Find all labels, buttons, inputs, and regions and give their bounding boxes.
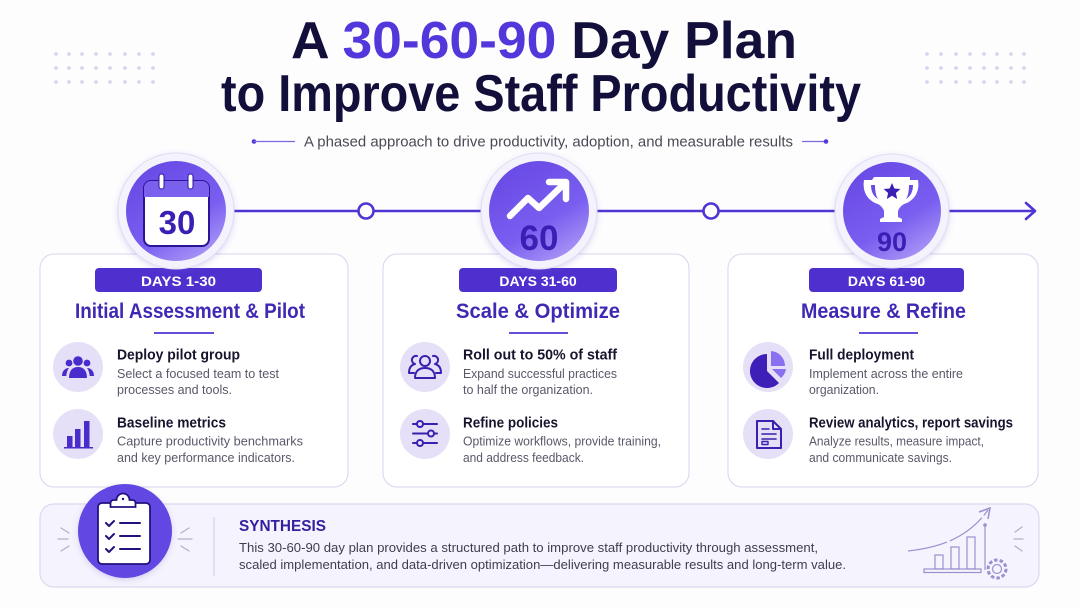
text: synthesis: [239, 518, 846, 572]
decorative dots left: [54, 52, 155, 84]
panel: synthesis: [40, 504, 1039, 587]
icon: rays around clipboard: [58, 528, 192, 551]
milestone icon: 90 trophy: 90: [877, 227, 907, 257]
badge: days 61-90: [809, 268, 964, 292]
icon: team outline: [400, 342, 450, 392]
item: roll out: to half the organization.: [463, 383, 593, 397]
text: synthesis: scaled implementation, and data-driven optimization—delivering measurable results and long-term value.: [239, 557, 846, 572]
badge: days 1-30: [95, 268, 262, 292]
item: refine policies: Optimize workflows, provide training,: [463, 434, 661, 448]
item: refine policies: Refine policies: [463, 416, 558, 432]
icon: bar chart: [53, 409, 103, 459]
heading: scale and optimize: Scale & Optimize: [456, 300, 620, 323]
panel: days 31-60: [383, 254, 689, 487]
badge: days 61-90: DAYS 61-90: [848, 273, 925, 289]
text: synthesis: This 30-60-90 day plan provides a structured path to improve staff productivity through assessment,: [239, 540, 818, 555]
icon: growth chart with gear: [908, 508, 1006, 578]
badge: days 1-30: DAYS 1-30: [141, 273, 216, 289]
milestone icon: 90 trophy: [835, 154, 949, 268]
title: A 30-60-90 Day Plan: [291, 12, 797, 70]
item: baseline metrics: [117, 416, 303, 465]
item: roll out: [463, 348, 617, 397]
heading: initial assessment: Initial Assessment & Pilot: [75, 300, 305, 323]
icon: pie chart: [743, 342, 793, 392]
item: full deployment: Full deployment: [809, 348, 914, 364]
item: baseline metrics: Baseline metrics: [117, 416, 226, 432]
text: synthesis: SYNTHESIS: [239, 518, 326, 535]
title: to Improve Staff Productivity: [221, 65, 861, 123]
item: refine policies: [463, 416, 661, 465]
icon: people group: [53, 342, 103, 392]
icon: clipboard checklist: [78, 484, 172, 578]
item: deploy pilot group: Deploy pilot group: [117, 348, 240, 364]
item: roll out: Roll out to 50% of staff: [463, 348, 617, 364]
heading: measure and refine: Measure & Refine: [801, 300, 966, 323]
item: baseline metrics: Capture productivity benchmarks: [117, 434, 303, 448]
icon: sliders: [400, 409, 450, 459]
item: review analytics: and communicate savings.: [809, 451, 952, 465]
item: review analytics: Review analytics, report savings: [809, 416, 1013, 432]
item: roll out: Expand successful practices: [463, 367, 617, 381]
item: refine policies: and address feedback.: [463, 451, 584, 465]
badge: days 31-60: [459, 268, 617, 292]
title: [221, 12, 861, 123]
panel: days 1-30: [40, 254, 348, 487]
icon: rays right: [1014, 527, 1023, 551]
item: full deployment: Implement across the entire: [809, 367, 963, 381]
item: review analytics: [809, 416, 1013, 465]
item: full deployment: [809, 348, 963, 397]
badge: days 31-60: DAYS 31-60: [499, 273, 577, 289]
item: full deployment: organization.: [809, 383, 879, 397]
icon: document: [743, 409, 793, 459]
milestone icon: 30 calendar: 30: [159, 204, 195, 241]
item: deploy pilot group: processes and tools.: [117, 383, 232, 397]
item: baseline metrics: and key performance indicators.: [117, 451, 295, 465]
panel: days 61-90: [728, 254, 1038, 487]
milestone icon: 60 growth arrow: [481, 153, 597, 269]
milestone icon: 30 calendar: [118, 153, 234, 269]
item: review analytics: Analyze results, measure impact,: [809, 434, 984, 448]
subtitle: A phased approach to drive productivity, adoption, and measurable results: [304, 134, 793, 150]
milestone icon: 60 growth arrow: 60: [520, 219, 558, 258]
item: deploy pilot group: [117, 348, 280, 397]
decorative dots right: [925, 52, 1026, 84]
timeline with arrow: [234, 203, 1035, 219]
item: deploy pilot group: Select a focused team to test: [117, 367, 280, 381]
